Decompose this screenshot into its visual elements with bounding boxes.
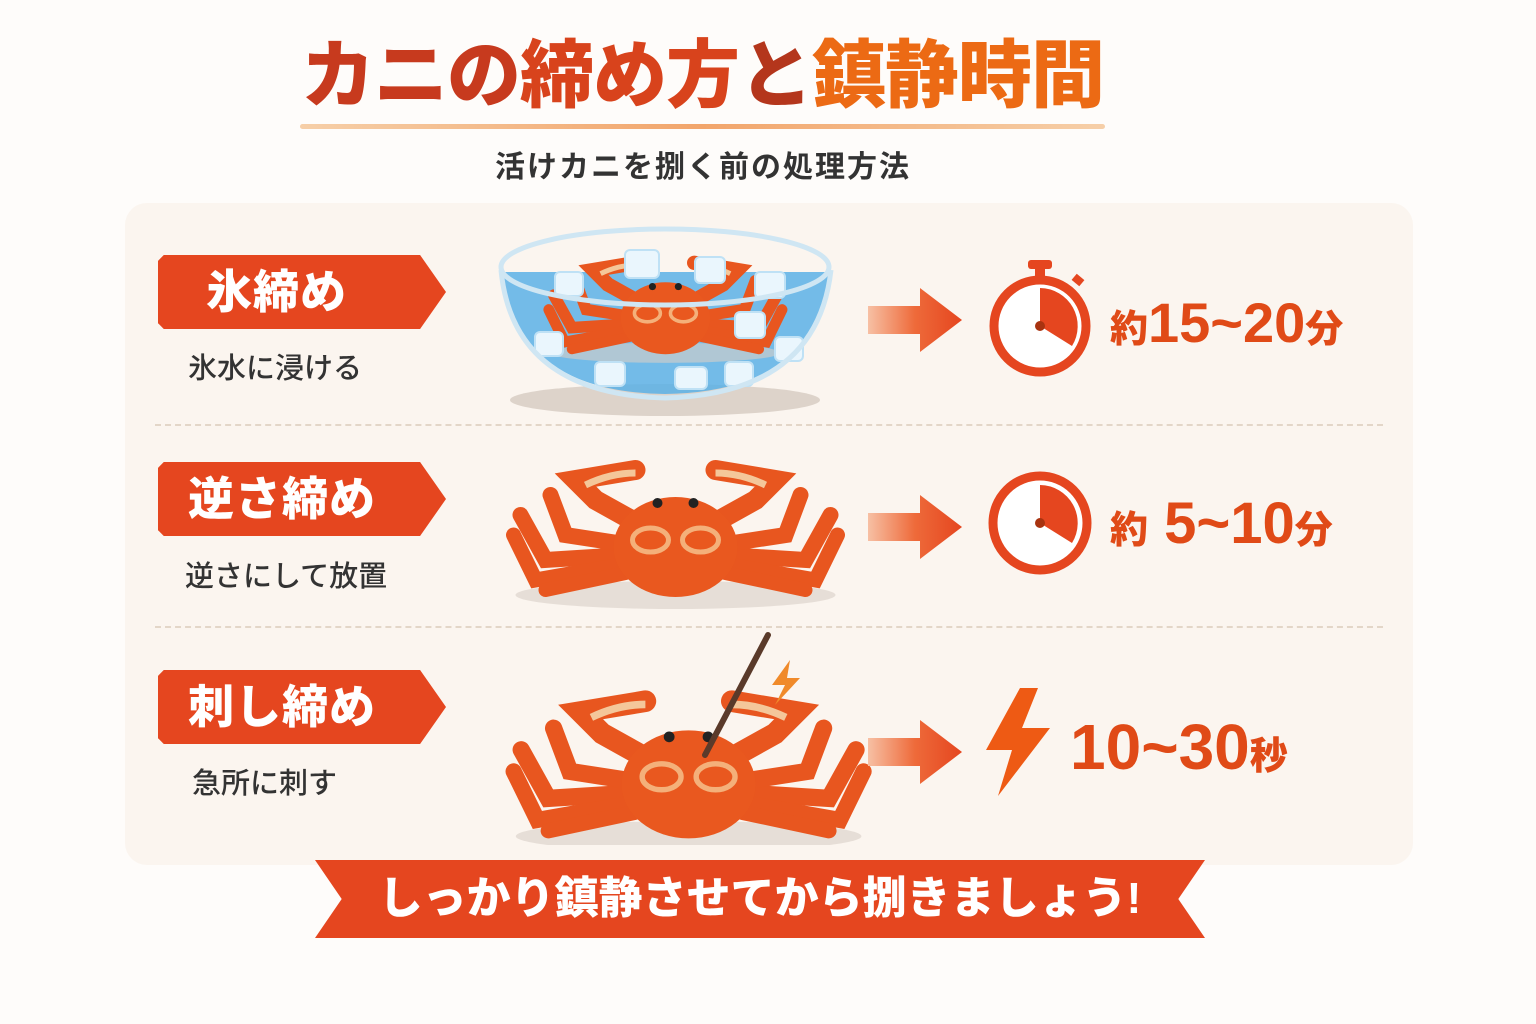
- tag: 刺し締め: [158, 670, 446, 744]
- subtitle: 活けカニを捌く前の処理方法: [495, 151, 911, 184]
- icon: crab: [506, 460, 845, 609]
- banner: [315, 860, 1205, 938]
- title underline: [300, 124, 1105, 129]
- banner: しっかり鎮静させてから捌きましょう!: [379, 874, 1141, 923]
- icon: stopwatch: [990, 260, 1090, 376]
- result: 約5~10分: 約 5~10分: [1110, 491, 1333, 556]
- icon: bowl with crab and ice: [498, 226, 834, 416]
- text: 急所に刺す: 急所に刺す: [192, 768, 337, 800]
- arrow 1: [868, 288, 962, 352]
- tag: 刺し締め: 刺し締め: [188, 681, 376, 733]
- result: 10~30秒: 10~30秒: [1070, 711, 1288, 783]
- title: カニの締め方と鎮静時間: [301, 34, 1104, 117]
- tag: 逆さ締め: [158, 462, 446, 536]
- icon: crab with stick: [506, 632, 872, 845]
- tag: 氷締め: [158, 255, 446, 329]
- result: 約15~20分: 約15~20分: [1110, 291, 1343, 354]
- text: 氷水に浸ける: 氷水に浸ける: [188, 353, 362, 385]
- tag: 氷締め: 氷締め: [206, 266, 347, 318]
- panel: methods: [125, 203, 1413, 865]
- text: 逆さにして放置: 逆さにして放置: [185, 561, 387, 593]
- icon: timer: [988, 472, 1092, 574]
- arrow 3: [868, 720, 962, 784]
- tag: 逆さ締め: 逆さ締め: [188, 473, 376, 525]
- arrow 2: [868, 495, 962, 559]
- icon: lightning: [986, 688, 1050, 796]
